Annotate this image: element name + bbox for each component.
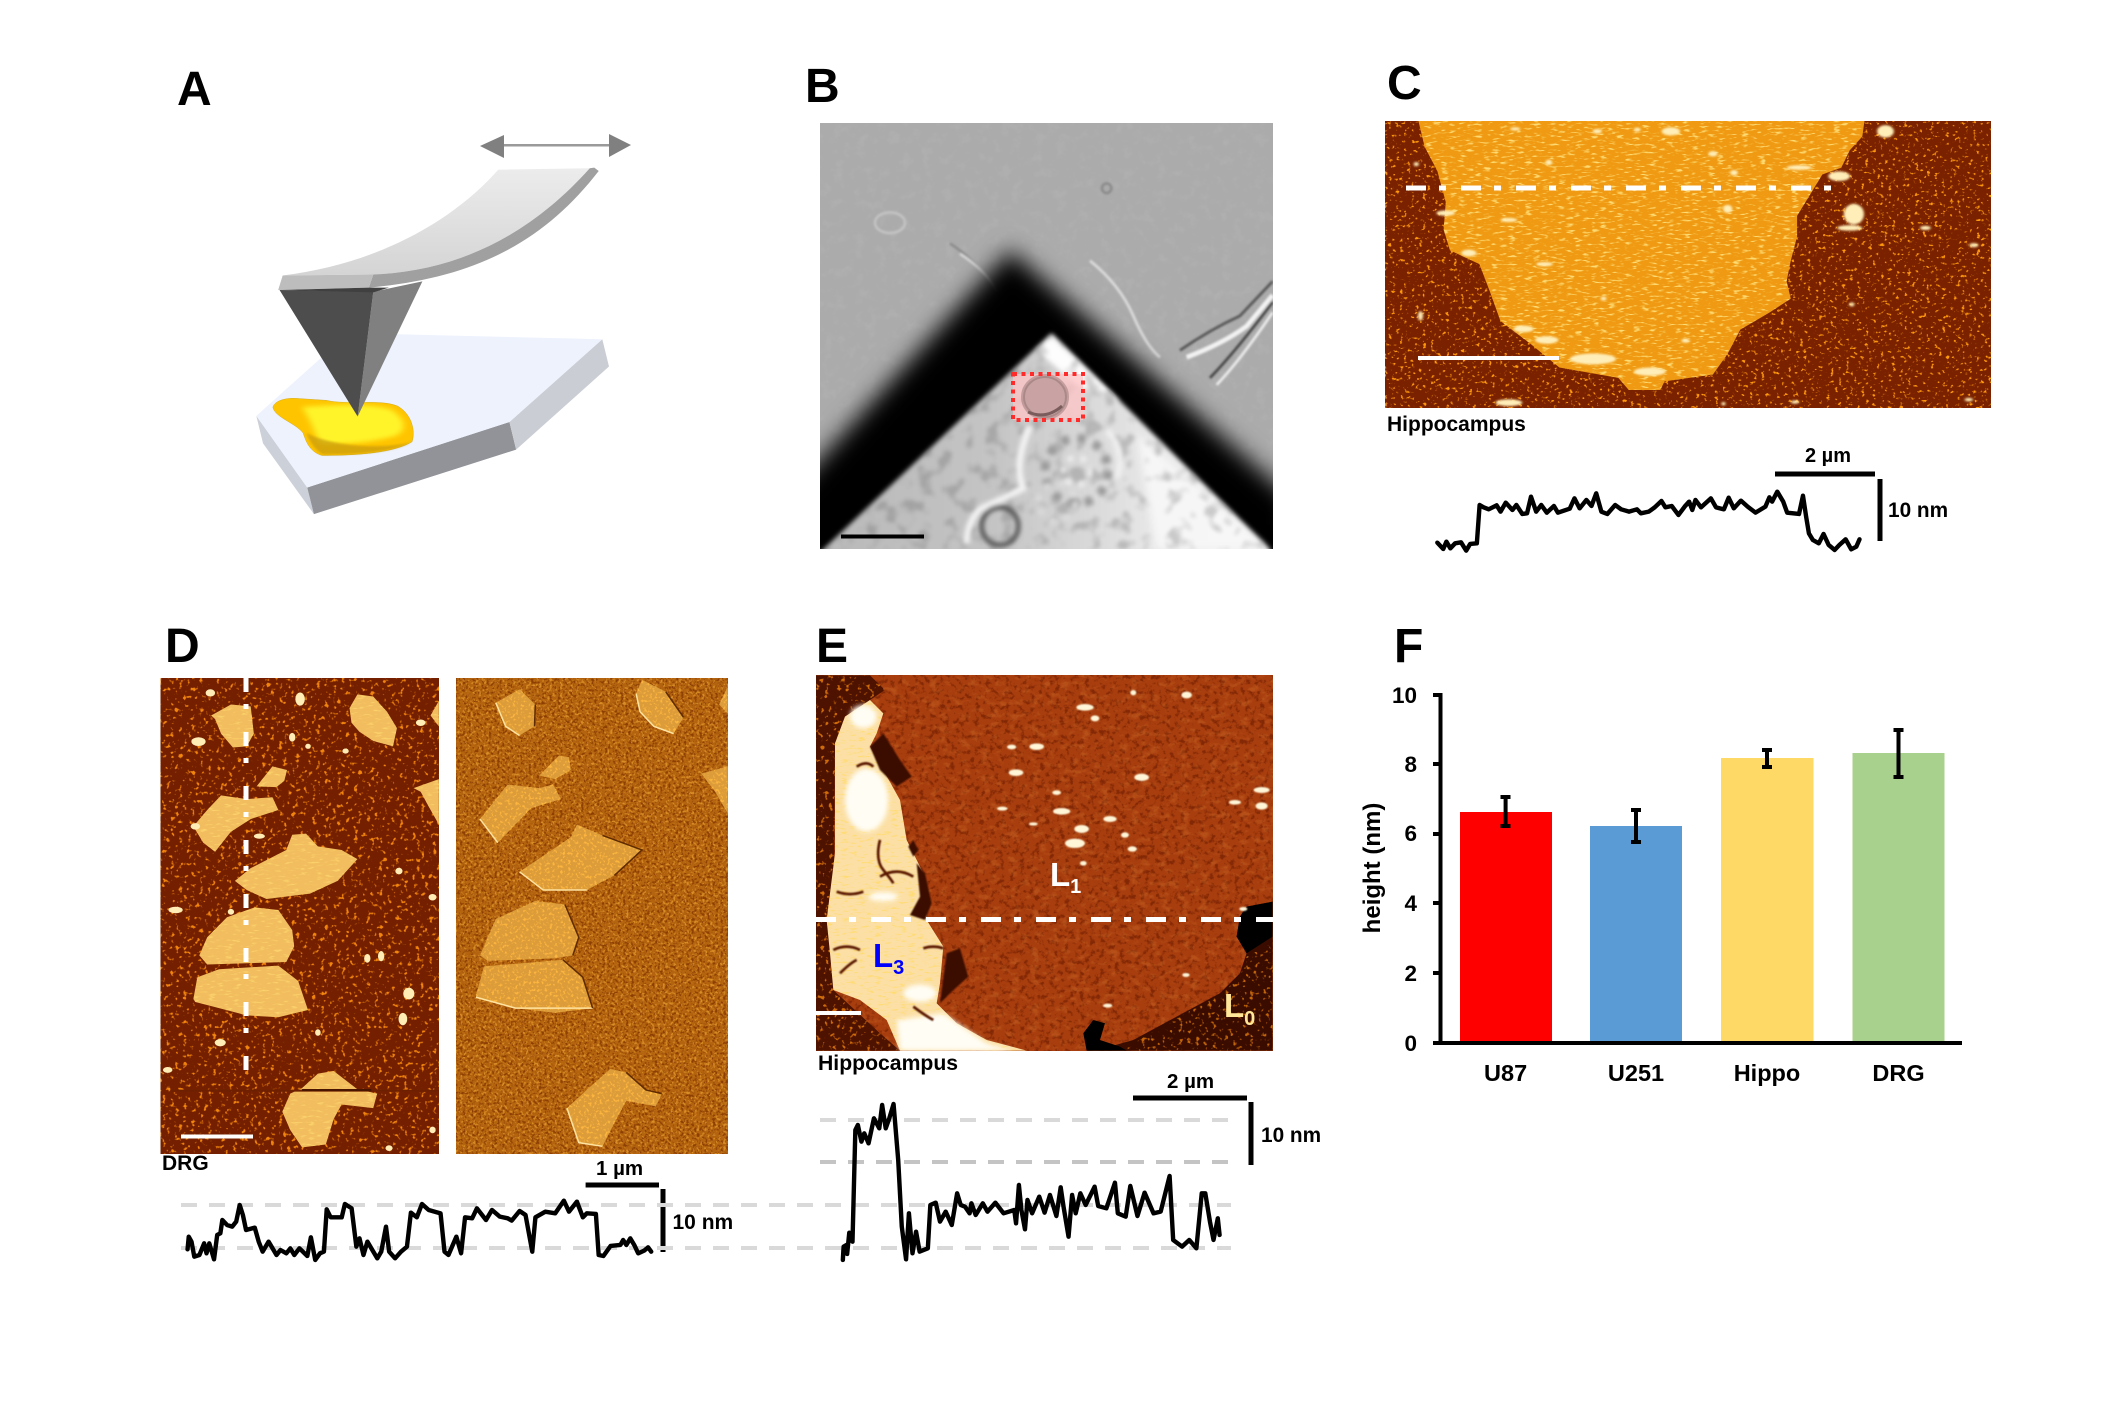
- dark holes beside L3: [870, 733, 968, 1003]
- y tick labels: 10: [1392, 683, 1417, 708]
- guide lines: upper levels: [820, 1120, 1228, 1162]
- label E: E: [816, 620, 848, 673]
- icon: curved cantilever and pyramidal tip: [278, 168, 599, 417]
- bar: Hippo: [1721, 758, 1814, 1043]
- x category labels: DRG: [1872, 1060, 1925, 1086]
- layer label L0: 0: [1244, 1008, 1255, 1030]
- scale bar: [181, 1134, 253, 1138]
- image: layered AFM height map: [816, 675, 1273, 1051]
- scale bar: [816, 1011, 861, 1015]
- image: AFM hippocampus EV sheet: [1385, 121, 1991, 408]
- scale bar: [841, 534, 924, 538]
- scale bar: horizontal and vertical: [1775, 474, 1880, 541]
- layer label L0: L: [1224, 987, 1244, 1024]
- panel A: AFM cantilever schematic: [177, 63, 631, 514]
- panel B: optical micrograph: [808, 68, 1273, 549]
- guide lines: reference levels shared by profiles D and E: [181, 1205, 1231, 1248]
- bright particles on L1: [997, 690, 1270, 1008]
- axes and ticks: [1433, 693, 1962, 1045]
- label A: A: [177, 63, 212, 116]
- image: height map: [160, 678, 439, 1154]
- scale bar: [1418, 356, 1559, 360]
- scale text: 2 µm: 2 µm: [1167, 1070, 1214, 1093]
- profile line marker: [1406, 186, 1833, 190]
- caption: DRG: DRG: [162, 1152, 209, 1175]
- x category labels: [1484, 1060, 1925, 1086]
- white bright zones of L3: [845, 705, 1013, 1051]
- profile line marker: [816, 917, 1273, 922]
- scale text: 10 nm: 10 nm: [672, 1211, 733, 1234]
- profile line marker: [244, 678, 248, 1076]
- scale text: 10 nm: 10 nm: [1888, 499, 1948, 522]
- y tick labels: [1392, 683, 1417, 1056]
- chart: height profile D: [188, 1201, 651, 1260]
- image: cantilever over cell: [820, 123, 1273, 549]
- scale bars: [586, 1185, 663, 1252]
- panel C: AFM height image with profile: [1385, 57, 1991, 551]
- label B: B: [805, 60, 840, 113]
- panel D: DRG AFM images with profile: [160, 620, 733, 1252]
- y tick labels: 6: [1404, 821, 1417, 846]
- bar: DRG: [1852, 753, 1944, 1043]
- bar: U251: [1590, 826, 1682, 1043]
- scale text: 10 nm: 10 nm: [1261, 1124, 1321, 1147]
- caption: Hippocampus: Hippocampus: [818, 1052, 958, 1075]
- x category labels: U87: [1484, 1060, 1527, 1086]
- L0 exposed substrate: [1087, 902, 1273, 1051]
- y tick labels: 4: [1404, 891, 1417, 916]
- layer label L3: L: [873, 937, 893, 974]
- layer label L3: 3: [893, 957, 904, 979]
- error bars: [1500, 730, 1904, 842]
- label D: D: [165, 620, 200, 673]
- bar: U87: [1460, 812, 1552, 1043]
- layer label L1: 1: [1070, 876, 1081, 898]
- chart: height profile C: [1437, 492, 1859, 551]
- y tick labels: 0: [1404, 1031, 1417, 1056]
- caption: Hippocampus: Hippocampus: [1387, 413, 1526, 436]
- chart: height profile E: [843, 1104, 1220, 1260]
- icon: yellow cell sample: [273, 398, 413, 455]
- highlight: red dashed box around cell: [1013, 374, 1083, 420]
- scale text: 1 µm: 1 µm: [596, 1157, 643, 1180]
- image: amplitude map: [456, 678, 728, 1154]
- x category labels: U251: [1608, 1060, 1664, 1086]
- scale text: 2 µm: 2 µm: [1805, 445, 1851, 467]
- y tick labels: 8: [1404, 752, 1417, 777]
- y tick labels: 2: [1404, 961, 1417, 986]
- scale bars: [1133, 1098, 1251, 1165]
- panel F: bar chart of heights: [1359, 620, 1962, 1086]
- label F: F: [1394, 620, 1423, 673]
- icon: substrate block: [256, 333, 609, 514]
- icon: scanning double arrow: [480, 134, 631, 158]
- y axis title: height (nm): [1359, 803, 1386, 933]
- layer label L1: L: [1050, 856, 1070, 893]
- x category labels: Hippo: [1734, 1060, 1800, 1086]
- label C: C: [1387, 57, 1422, 110]
- panel E: hippocampus multilayer AFM with profile: [816, 620, 1321, 1260]
